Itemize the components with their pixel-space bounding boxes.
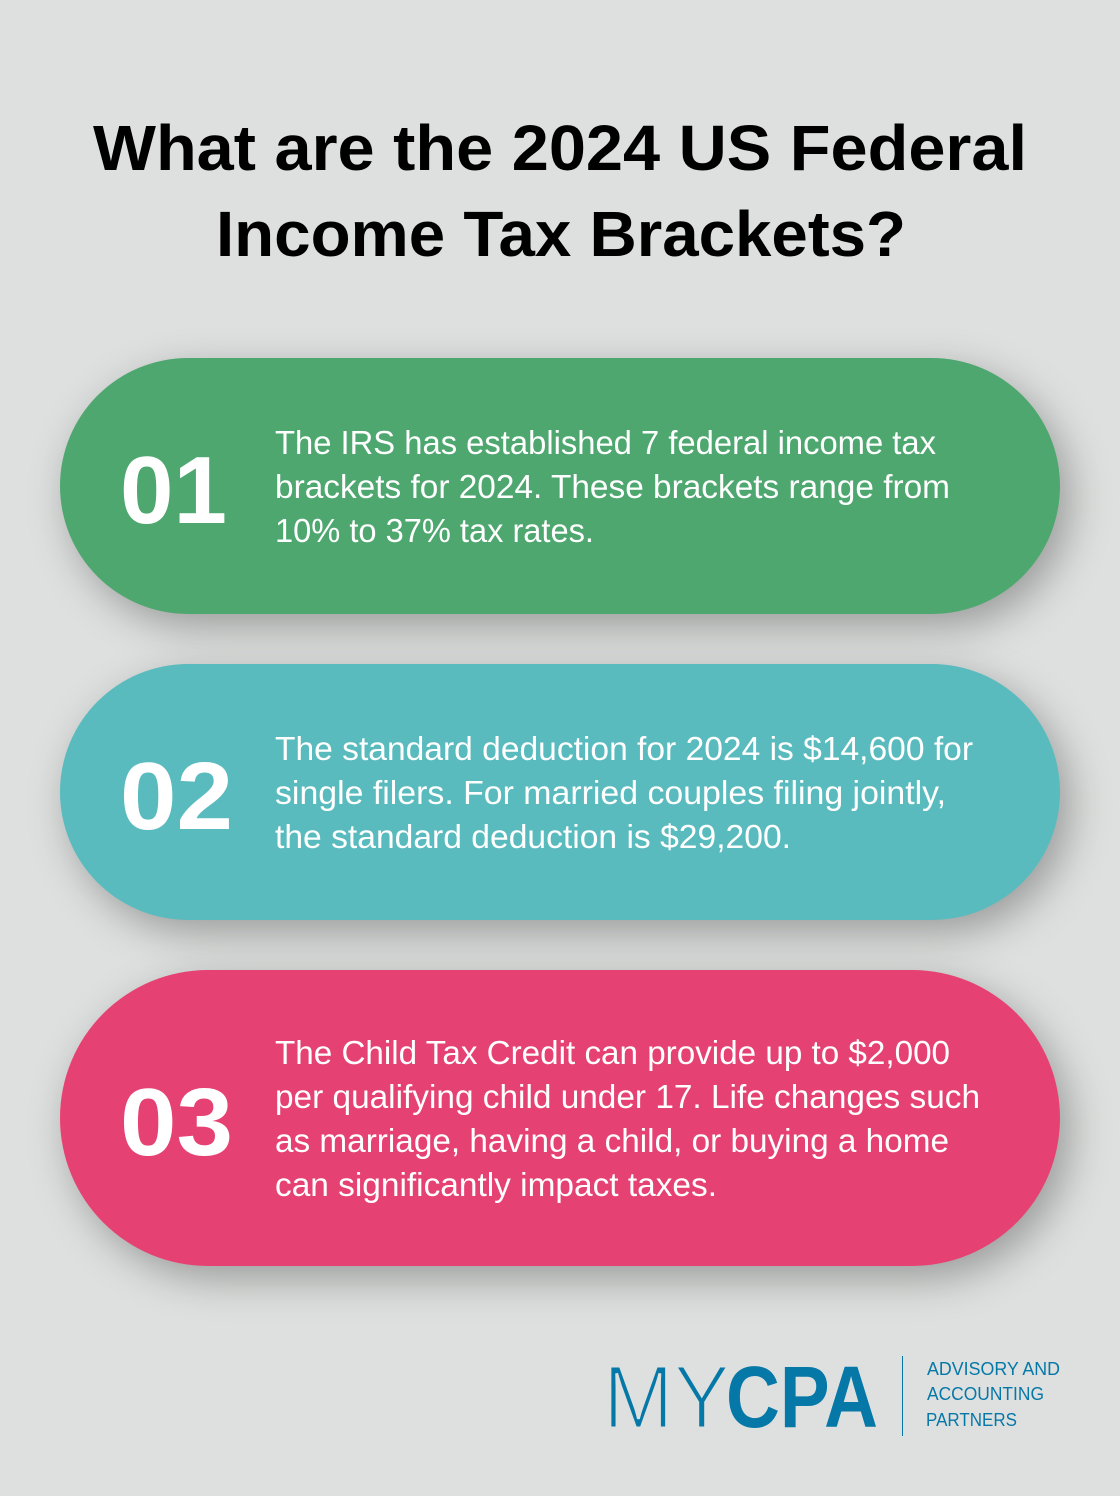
number 01: 01 <box>120 437 227 544</box>
text: step 01: 10% to 37% tax rates. <box>275 512 594 549</box>
title: Income Tax Brackets? <box>216 198 906 270</box>
logo wordmark: CPA <box>726 1349 878 1446</box>
text: step 01 <box>275 424 950 549</box>
number 03: 03 <box>120 1069 233 1176</box>
text: step 03: per qualifying child under 17. Life changes such <box>275 1078 980 1115</box>
logo tagline: PARTNERS <box>926 1410 1017 1430</box>
text: step 02 <box>275 730 973 855</box>
title <box>93 112 1027 270</box>
text: step 02: The standard deduction for 2024 is $14,600 for <box>275 730 973 767</box>
panel: step 03 <box>60 970 1060 1266</box>
text: step 02: single filers. For married couples filing jointly, <box>275 774 946 811</box>
logo tagline: ACCOUNTING <box>927 1384 1044 1404</box>
title: What are the 2024 US Federal <box>93 112 1027 184</box>
text: step 03 <box>275 1034 980 1203</box>
text: step 02: the standard deduction is $29,200. <box>275 818 791 855</box>
logo wordmark: MY <box>603 1348 730 1448</box>
panel: step 01 <box>60 358 1060 614</box>
text: step 03: can significantly impact taxes. <box>275 1166 717 1203</box>
text: step 03: as marriage, having a child, or buying a home <box>275 1122 949 1159</box>
text: step 01: brackets for 2024. These brackets range from <box>275 468 950 505</box>
logo wordmark <box>603 1348 878 1448</box>
logo tagline <box>926 1359 1060 1430</box>
panel: step 02 <box>60 664 1060 920</box>
text: step 03: The Child Tax Credit can provide up to $2,000 <box>275 1034 950 1071</box>
logo: MYCPA <box>603 1348 1060 1448</box>
number 02: 02 <box>120 743 233 850</box>
text: step 01: The IRS has established 7 federal income tax <box>275 424 936 461</box>
logo tagline: ADVISORY AND <box>927 1359 1060 1379</box>
